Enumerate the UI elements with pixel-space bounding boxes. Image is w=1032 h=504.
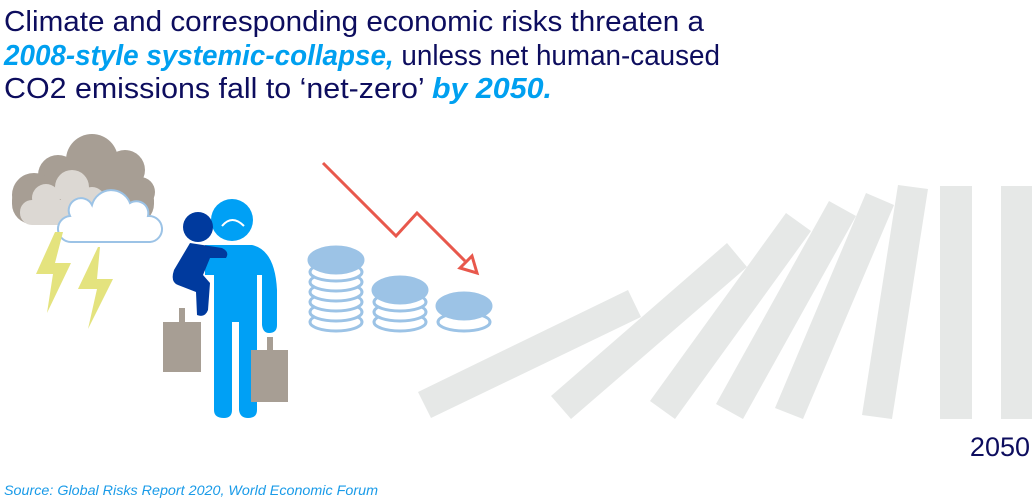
icon: coin stacks: [309, 247, 491, 331]
source: Source: Global Risks Report 2020, World Economic Forum: [4, 482, 378, 498]
falling dominoes: [418, 185, 1032, 419]
title: 2008-style systemic-collapse, unless net human-caused: [3, 40, 720, 72]
title: [3, 6, 720, 105]
title: CO2 emissions fall to ‘net-zero’ by 2050.: [4, 73, 552, 105]
icon: storm clouds: [12, 134, 162, 329]
arrow: declining red line: [323, 163, 477, 273]
icon: lightning bolts: [36, 232, 113, 329]
icon: person carrying child and bags: [163, 199, 288, 418]
label: 2050: 2050: [970, 432, 1030, 462]
title: Climate and corresponding economic risks threaten a: [4, 6, 705, 38]
